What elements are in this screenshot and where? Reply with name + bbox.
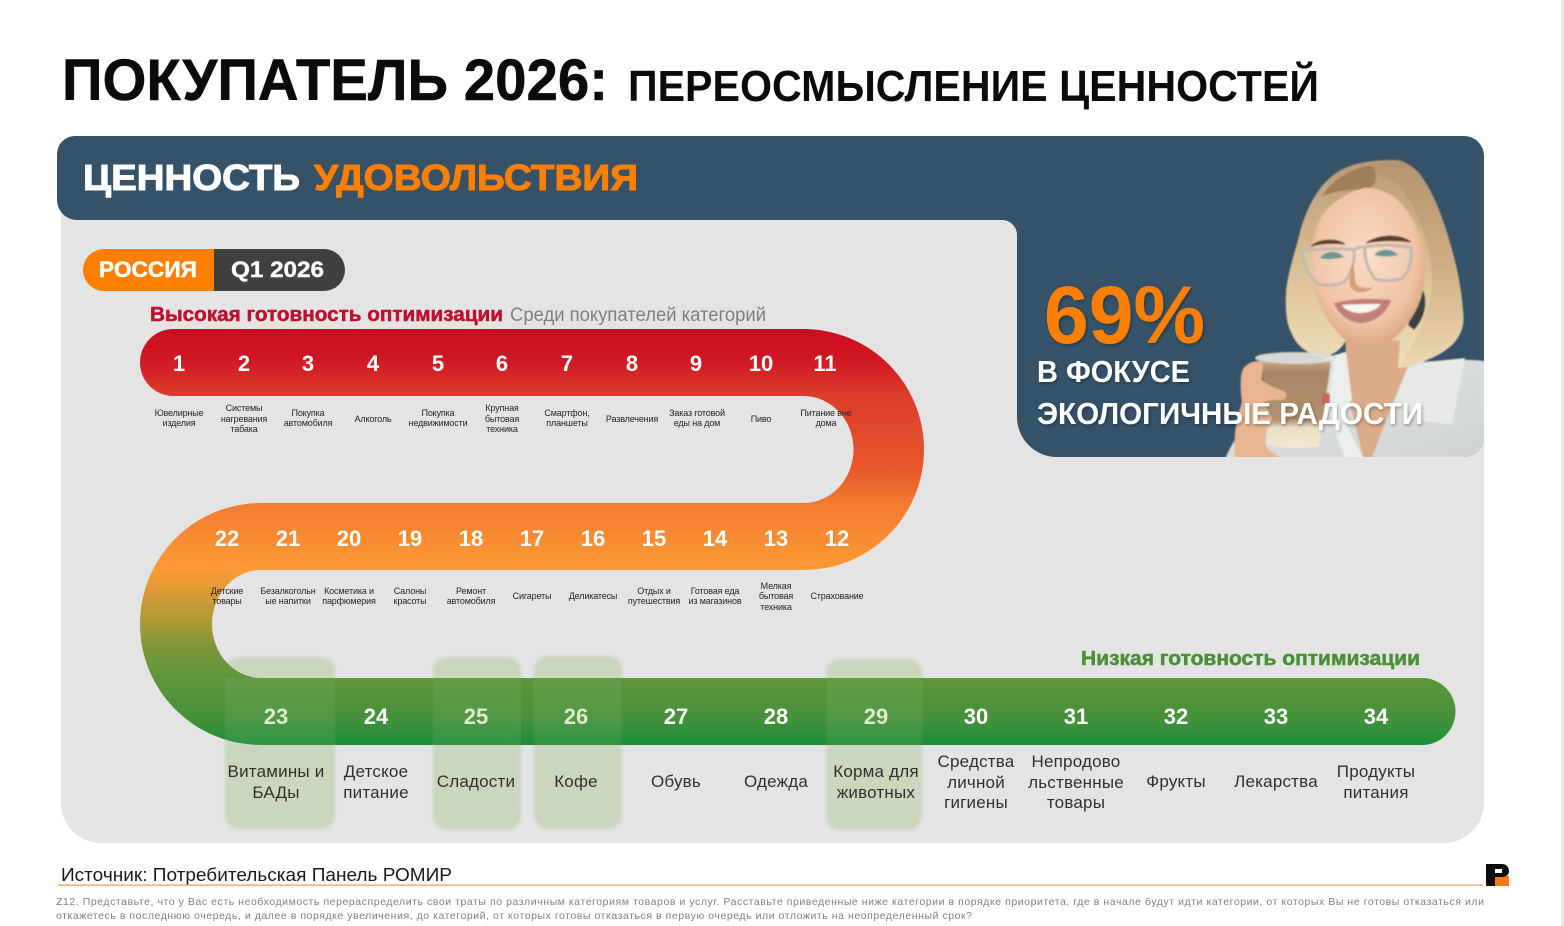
numbers row 1: 6: [496, 351, 508, 376]
photo: smiling woman with iced coffee: [1225, 160, 1490, 460]
category labels row 3: животных: [837, 783, 915, 802]
jacket: [1225, 352, 1490, 460]
category labels row 3: Непродово: [1032, 752, 1120, 771]
right collar: [1395, 358, 1465, 425]
category labels row 3: личной: [947, 773, 1005, 792]
numbers row 1: 8: [626, 351, 638, 376]
category labels row 1: Смартфон,: [544, 408, 590, 418]
hair: [1286, 160, 1464, 368]
numbers row 2: 13: [764, 526, 788, 551]
category labels row 3: гигиены: [944, 793, 1008, 812]
numbers row 2: [215, 526, 849, 551]
category labels row 1: табака: [230, 424, 258, 434]
numbers row 3: 28: [764, 704, 788, 729]
nose: [1350, 262, 1373, 292]
category labels row 2: Детские: [211, 586, 243, 596]
category labels row 2: техника: [760, 602, 792, 612]
numbers row 3: [264, 704, 1389, 729]
cup body: [1262, 362, 1331, 448]
numbers row 1: 1: [173, 351, 185, 376]
category labels row 1: Пиво: [751, 414, 771, 424]
title: [62, 48, 1319, 113]
category labels row 2: Сигареты: [513, 591, 551, 601]
category labels row 2: бытовая: [759, 591, 793, 601]
lips: [1334, 299, 1391, 323]
numbers row 1: 10: [749, 351, 773, 376]
category labels row 2: Безалкогольн: [260, 586, 316, 596]
logo: [1486, 864, 1509, 886]
category labels row 1: Покупка: [422, 408, 455, 418]
panel: grey background: [61, 190, 1484, 843]
heading: high readiness: Среди покупателей категорий: [510, 305, 766, 326]
numbers row 3: 30: [964, 704, 988, 729]
category labels row 3: Одежда: [744, 772, 808, 791]
numbers row 2: 15: [642, 526, 666, 551]
category labels row 2: Отдых и: [637, 586, 671, 596]
category labels row 1: Ювелирные: [155, 408, 204, 418]
footnote: Z12. Представьте, что у Вас есть необходимость перераспределить свои траты по различным категориям товаров и услуг. Расставьте приведенные ниже категории в порядке приоритета, где в начале будут идти категории, от которых Вы не готовы отказаться или: [56, 896, 1484, 908]
numbers row 1: 7: [561, 351, 573, 376]
category labels row 1: еды на дом: [674, 418, 720, 428]
numbers row 2: 20: [337, 526, 361, 551]
heading: low readiness: Низкая готовность оптимизации: [1081, 648, 1420, 670]
numbers row 1: [173, 351, 837, 376]
numbers row 1: 9: [690, 351, 702, 376]
category labels row 3: льственные: [1028, 773, 1124, 792]
category labels row 1: Питание вне: [800, 408, 852, 418]
neck and chest: [1344, 339, 1408, 457]
numbers row 2: 21: [276, 526, 300, 551]
category labels row 1: недвижимости: [409, 418, 468, 428]
badge: region and period: РОССИЯ: [99, 257, 197, 282]
numbers row 2: 17: [520, 526, 544, 551]
numbers row 2: 14: [703, 526, 728, 551]
footnote: [56, 896, 1484, 922]
numbers row 2: 12: [825, 526, 849, 551]
callout: 69 percent: 69%: [1044, 270, 1205, 361]
heading: value of pleasure: [83, 157, 638, 198]
category labels row 3: товары: [1047, 793, 1105, 812]
category labels row 2: ые напитки: [265, 596, 311, 606]
title: ПЕРЕОСМЫСЛЕНИЕ ЦЕННОСТЕЙ: [628, 60, 1319, 111]
numbers row 1: 11: [813, 351, 837, 376]
hair right side: [1389, 170, 1462, 368]
category labels row 1: Алкоголь: [355, 414, 392, 424]
numbers row 3: 26: [564, 704, 588, 729]
numbers row 3: 27: [664, 704, 688, 729]
category labels row 3: Обувь: [651, 772, 701, 791]
category labels row 2: Готовая еда: [691, 586, 739, 596]
category labels row 1: техника: [486, 424, 518, 434]
category labels row 2: красоты: [394, 596, 426, 606]
category labels row 3: Корма для: [833, 762, 919, 781]
category labels row 2: Салоны: [394, 586, 426, 596]
category labels row 1: автомобиля: [284, 418, 333, 428]
numbers row 1: 4: [367, 351, 380, 376]
eyes: [1320, 252, 1344, 259]
face: [1311, 188, 1425, 347]
finger behind cup: [1322, 393, 1330, 405]
category labels row 2: Страхование: [810, 591, 864, 601]
numbers row 3: 32: [1164, 704, 1188, 729]
heading: value of pleasure: ЦЕННОСТЬ: [83, 157, 300, 198]
category labels row 1: изделия: [162, 418, 196, 428]
numbers row 1: 5: [432, 351, 444, 376]
category labels row 1: бытовая: [485, 414, 519, 424]
category labels row 1: планшеты: [546, 418, 588, 428]
category labels row 1: Крупная: [485, 403, 519, 413]
category labels row 1: Покупка: [292, 408, 325, 418]
category labels row 3: Витамины и: [228, 762, 324, 781]
badge: region and period: [83, 249, 345, 291]
category labels row 3: Фрукты: [1146, 772, 1206, 791]
numbers row 3: 33: [1264, 704, 1288, 729]
numbers row 2: 22: [215, 526, 239, 551]
category labels row 1: дома: [816, 418, 837, 428]
highlights: selected categories: [225, 656, 922, 830]
numbers row 3: 25: [464, 704, 488, 729]
category labels row 3: питания: [1343, 783, 1409, 802]
callout: 69 percent: [1037, 270, 1423, 431]
cup rim: [1256, 352, 1336, 364]
category labels row 2: автомобиля: [447, 596, 496, 606]
glasses: [1302, 245, 1411, 285]
category labels row 2: Косметика и: [324, 586, 374, 596]
numbers row 3: 24: [364, 704, 389, 729]
category labels row 2: Мелкая: [761, 581, 792, 591]
category labels row 3: Продукты: [1337, 762, 1415, 781]
category labels row 1: Заказ готовой: [669, 408, 725, 418]
numbers row 3: 34: [1364, 704, 1389, 729]
source: Источник: Потребительская Панель РОМИР: [61, 864, 452, 885]
category labels row 2: путешествия: [628, 596, 680, 606]
highlight overlays on band: [225, 678, 922, 745]
category labels row 2: товары: [212, 596, 242, 606]
left collar: [1328, 352, 1364, 460]
numbers row 3: 23: [264, 704, 288, 729]
footnote: откажетесь в последнюю очередь, и далее в порядке увеличения, до категорий, от которых готовы отказаться в первую очередь или отложить на неопределенный срок?: [56, 910, 972, 922]
category labels row 3: Средства: [938, 752, 1015, 771]
panel: navy header with callout block: [57, 136, 1484, 457]
category labels row 3: Лекарства: [1234, 772, 1318, 791]
category labels row 2: парфюмерия: [322, 596, 376, 606]
category labels row 1: Развлечения: [606, 414, 658, 424]
numbers row 3: 31: [1064, 704, 1088, 729]
category labels row 3: питание: [343, 783, 409, 802]
heading: high readiness: Высокая готовность оптимизации: [150, 304, 503, 326]
callout: 69 percent: ЭКОЛОГИЧНЫЕ РАДОСТИ: [1037, 396, 1423, 431]
heading: value of pleasure: УДОВОЛЬСТВИЯ: [314, 157, 638, 198]
numbers row 1: 2: [238, 351, 250, 376]
numbers row 2: 16: [581, 526, 605, 551]
category labels row 3: БАДы: [252, 783, 300, 802]
category labels row 1: Системы: [226, 403, 262, 413]
chart: serpentine ranking band: [140, 329, 1456, 745]
category labels row 1: нагревания: [221, 414, 267, 424]
callout: 69 percent: В ФОКУСЕ: [1037, 354, 1190, 389]
badge: region and period: Q1 2026: [231, 257, 324, 282]
category labels row 1: [155, 403, 852, 434]
numbers row 1: 3: [302, 351, 314, 376]
numbers row 2: 18: [459, 526, 483, 551]
category labels row 2: Ремонт: [456, 586, 486, 596]
face shadow strip: [1408, 285, 1425, 330]
numbers row 2: 19: [398, 526, 422, 551]
category labels row 2: из магазинов: [689, 596, 742, 606]
category labels row 3: Сладости: [437, 772, 515, 791]
numbers row 3: 29: [864, 704, 888, 729]
heading: high readiness: [150, 304, 766, 326]
page edge strip: [1561, 0, 1564, 926]
teeth: [1342, 304, 1381, 313]
hand: [1234, 361, 1286, 460]
source rule: [58, 884, 1483, 886]
category labels row 2: Деликатесы: [569, 591, 617, 601]
eyebrows: [1311, 240, 1345, 246]
hair parting shadow: [1322, 166, 1376, 196]
category labels row 3: Детское: [344, 762, 408, 781]
category labels row 2: [211, 581, 864, 612]
category labels row 3: [228, 752, 1415, 812]
title: ПОКУПАТЕЛЬ 2026:: [62, 48, 608, 113]
category labels row 3: Кофе: [554, 772, 598, 791]
